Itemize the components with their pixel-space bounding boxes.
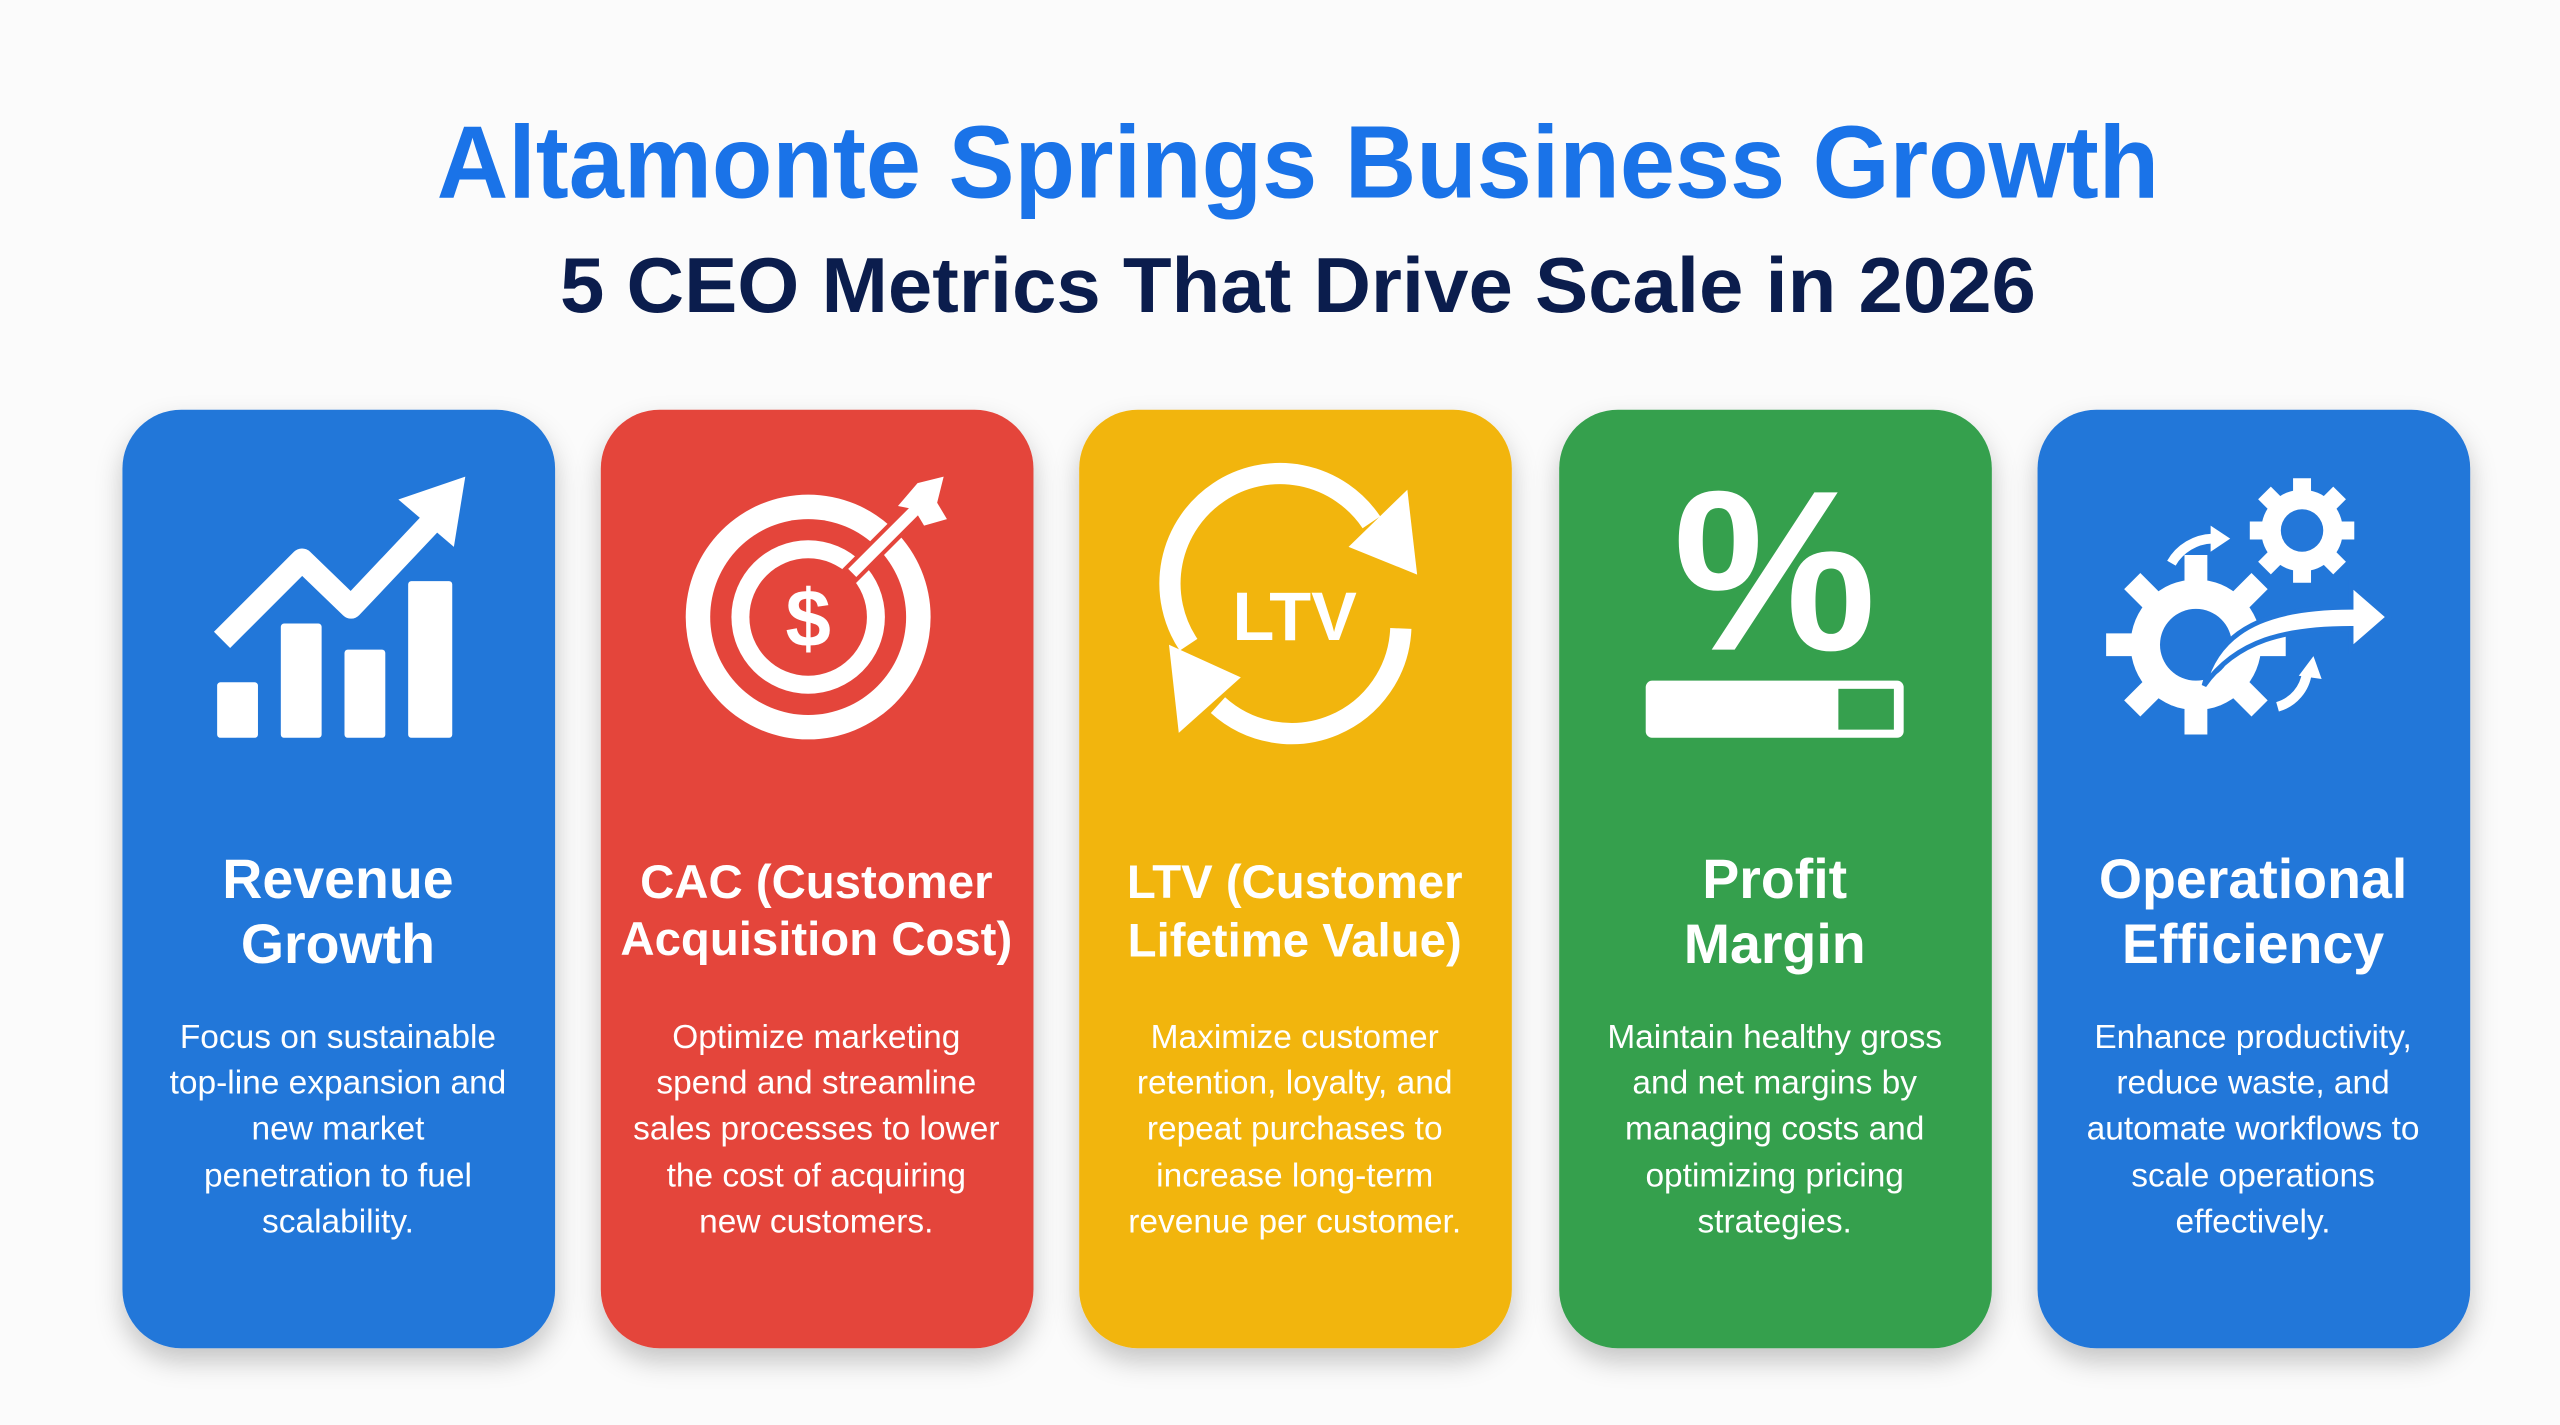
text block: Maintain healthy gross [1607, 1019, 1942, 1056]
text block: increase long-term [1156, 1158, 1433, 1195]
text block: effectively. [2176, 1203, 2331, 1240]
text block: new market [251, 1110, 425, 1147]
text block: managing costs and [1625, 1110, 1924, 1147]
panel: profit margin [1559, 410, 1992, 1348]
text block: Focus on sustainable [180, 1019, 496, 1056]
text block: Enhance productivity, [2094, 1019, 2412, 1056]
heading: CAC (Customer [640, 856, 993, 909]
text block [1607, 1019, 1942, 1240]
text block: optimizing pricing [1645, 1158, 1904, 1195]
text block: scale operations [2131, 1158, 2375, 1195]
icon: target with dollar [686, 477, 947, 739]
text block [2087, 1019, 2419, 1240]
text block: Maximize customer [1151, 1019, 1439, 1056]
panel: CAC: Acquisition Cost) [620, 913, 1012, 966]
panel: LTV [1079, 410, 1512, 1348]
heading: Revenue [222, 848, 454, 910]
title: Altamonte Springs Business Growth [437, 105, 2159, 220]
text block: automate workflows to [2087, 1110, 2419, 1147]
icon: LTV cycle: LTV [1232, 578, 1357, 655]
text block [170, 1019, 506, 1240]
icon: gears with arrow [2106, 478, 2389, 735]
icon: LTV cycle [1169, 474, 1417, 734]
icon: percent bar: % [1673, 444, 1876, 699]
text block: new customers. [699, 1203, 933, 1240]
panel: CAC [601, 410, 1033, 1348]
text block: revenue per customer. [1128, 1203, 1461, 1240]
icon: percent bar [1646, 444, 1904, 738]
text block: penetration to fuel [204, 1158, 472, 1195]
text block: retention, loyalty, and [1137, 1065, 1452, 1102]
panel: revenue growth [122, 410, 555, 1348]
text block: Optimize marketing [672, 1019, 960, 1056]
icon: growth chart [217, 477, 465, 738]
text block: strategies. [1698, 1203, 1852, 1240]
panel: LTV: Lifetime Value) [1128, 915, 1462, 968]
text block: sales processes to lower [633, 1110, 999, 1147]
text block: top-line expansion and [170, 1065, 506, 1102]
text block: spend and streamline [656, 1065, 976, 1102]
icon: target with dollar: $ [785, 573, 831, 664]
panel: revenue growth: Growth [241, 913, 435, 975]
subtitle: 5 CEO Metrics That Drive Scale in 2026 [560, 241, 2036, 329]
text block: scalability. [262, 1203, 414, 1240]
text block: and net margins by [1632, 1065, 1917, 1102]
panel: operational efficiency: Efficiency [2122, 913, 2384, 975]
heading: Profit [1702, 848, 1847, 910]
text block: reduce waste, and [2116, 1065, 2390, 1102]
panel: profit margin: Margin [1684, 913, 1866, 975]
heading: LTV (Customer [1127, 856, 1463, 909]
panel: operational efficiency [2038, 410, 2470, 1348]
text block [633, 1019, 999, 1240]
text block: the cost of acquiring [667, 1158, 966, 1195]
heading: Operational [2099, 848, 2407, 910]
text block [1128, 1019, 1461, 1240]
text block: repeat purchases to [1147, 1110, 1443, 1147]
